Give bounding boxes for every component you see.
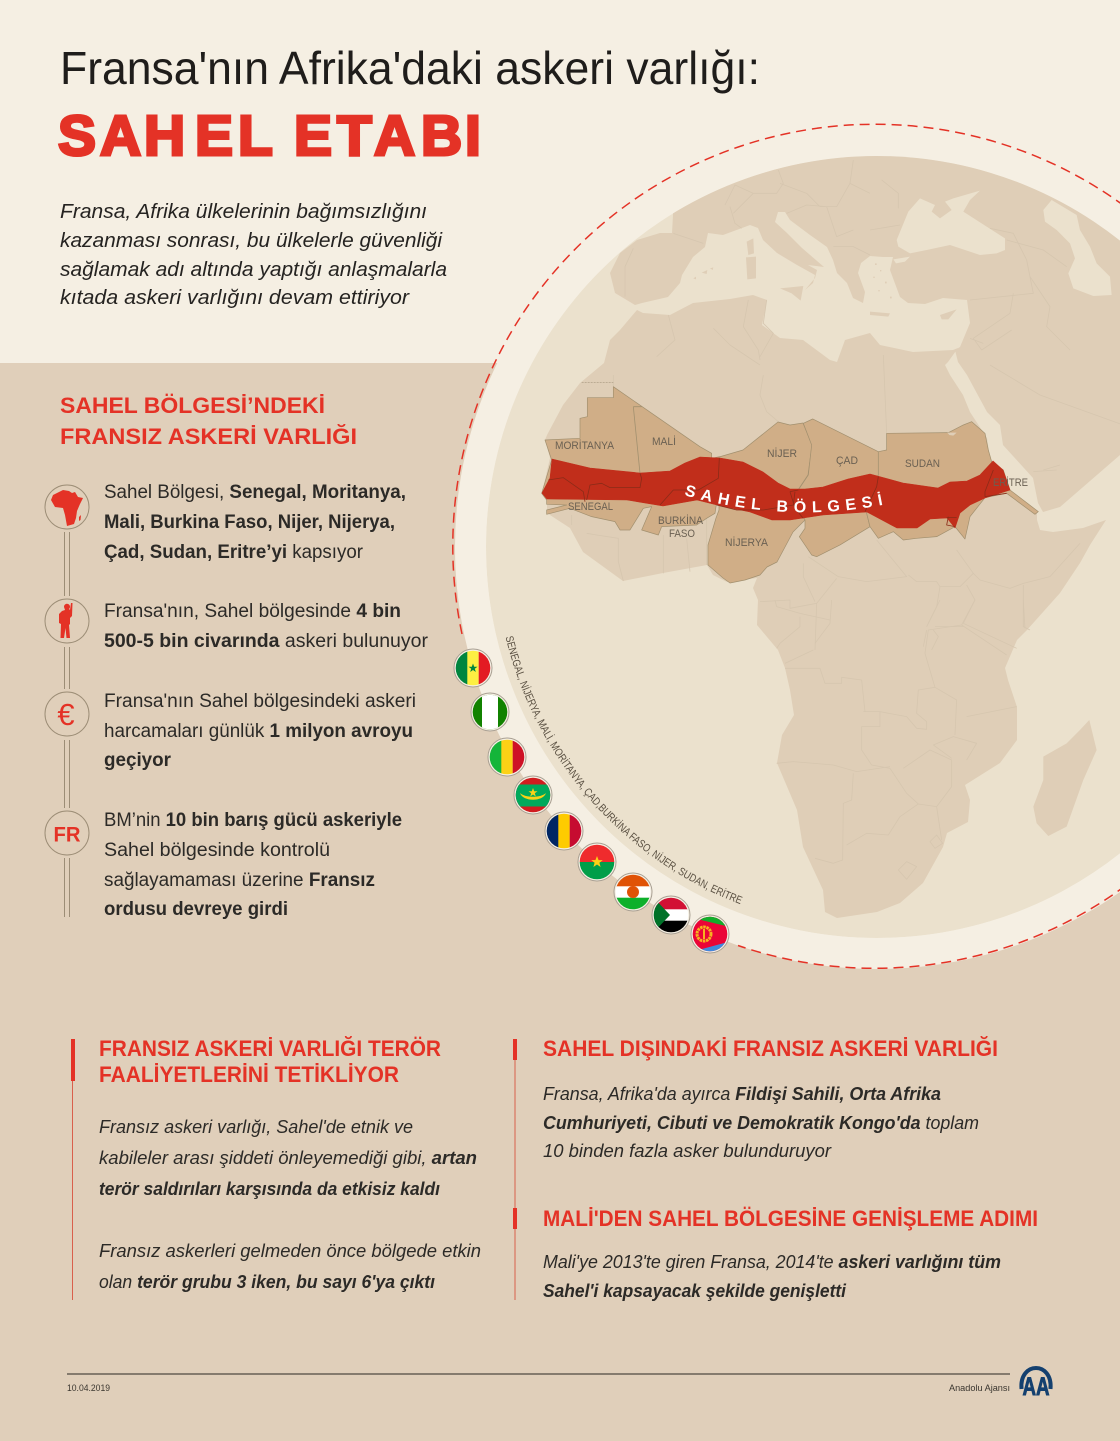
text: terror: Fransız askeri varlığı, Sahel'de etnik ve bbox=[99, 1117, 413, 1137]
text: spending bbox=[104, 691, 416, 771]
text: Sahel countries: Mali, Burkina Faso, Nijer, Nijerya, bbox=[104, 512, 395, 533]
heading: Mali expansion: MALİ'DEN SAHEL BÖLGESİNE GENİŞLEME ADIMI bbox=[543, 1206, 1038, 1231]
country labels: SUDAN bbox=[905, 458, 940, 470]
internal borders on band bbox=[548, 458, 795, 510]
flag: Mauritania bbox=[514, 776, 552, 814]
land and borders: Madagascar and southern Africa bbox=[775, 600, 1097, 879]
text: UN peacekeepers: sağlayamaması üzerine Fransız bbox=[104, 870, 375, 891]
panel: terror bbox=[71, 1036, 481, 1300]
islands: Crete, Cyprus, Aegean bbox=[870, 263, 957, 319]
heading: outside Sahel: SAHEL DIŞINDAKİ FRANSIZ ASKERİ VARLIĞI bbox=[543, 1036, 998, 1061]
text: UN peacekeepers: ordusu devreye girdi bbox=[104, 899, 288, 920]
borders: central Africa bbox=[760, 540, 1080, 650]
logo: Anadolu Agency: AA bbox=[1022, 1373, 1050, 1401]
intro text: kıtada askeri varlığını devam ettiriyor bbox=[60, 287, 410, 309]
country labels: MORİTANYA bbox=[555, 439, 615, 452]
Sahel countries bbox=[542, 387, 1038, 583]
red Sahel band bbox=[542, 457, 1010, 528]
text: UN peacekeepers bbox=[104, 810, 402, 920]
water: Caspian bbox=[1043, 200, 1112, 296]
country labels: BURKİNA bbox=[658, 514, 704, 527]
heading: terror: FRANSIZ ASKERİ VARLIĞI TERÖR bbox=[99, 1036, 441, 1061]
icon: soldier bbox=[45, 599, 89, 643]
borders around Sahara and the Red Sea bbox=[713, 328, 1120, 472]
intro text: sağlamak adı altında yaptığı anlaşmalarla bbox=[60, 259, 447, 281]
text: terror: kabileler arası şiddeti önleyemediği gibi, artan bbox=[99, 1148, 477, 1168]
text: terror bbox=[99, 1117, 481, 1292]
heading: terror bbox=[99, 1036, 441, 1087]
country labels: MALİ bbox=[652, 435, 676, 448]
text: spending: geçiyor bbox=[104, 750, 172, 771]
curved list of countries: SENEGAL, NİJERYA, MALİ, MORİTANYA, ÇAD,BURKİNA FASO, NİJER, SUDAN, ERİTRE bbox=[506, 636, 743, 904]
water and islands in the north-east bbox=[870, 180, 1112, 350]
flag: Burkina Faso bbox=[578, 843, 616, 881]
logo: Anadolu Agency bbox=[1021, 1368, 1051, 1401]
flag: Nigeria bbox=[471, 693, 509, 731]
icon: euro bbox=[45, 692, 89, 736]
text: terror: olan terör grubu 3 iken, bu sayı 6'ya çıktı bbox=[99, 1272, 435, 1292]
text: Sahel countries: Çad, Sudan, Eritre’yi kapsıyor bbox=[104, 542, 364, 563]
country labels: NİJERYA bbox=[725, 536, 769, 549]
Chad and Sudan bbox=[798, 419, 1038, 557]
globe ring bbox=[455, 125, 1120, 969]
text: Mali expansion bbox=[543, 1252, 1001, 1301]
intro text: Fransa, Afrika ülkelerinin bağımsızlığını bbox=[60, 201, 427, 223]
flag: Eritrea bbox=[691, 915, 729, 953]
source: Anadolu Ajansı bbox=[949, 1383, 1010, 1393]
water: Marmara bbox=[893, 257, 910, 263]
land: Africa bbox=[542, 295, 1106, 918]
dashed red orbit bbox=[453, 124, 1120, 968]
section heading: FRANSIZ ASKERİ VARLIĞI bbox=[60, 424, 357, 449]
text: outside Sahel: Cumhuriyeti, Cibuti ve Demokratik Kongo'da toplam bbox=[543, 1113, 979, 1133]
section heading: SAHEL BÖLGESİ’NDEKİ bbox=[60, 393, 325, 418]
icon: FR: FR bbox=[54, 824, 80, 846]
Niger and Nigeria bbox=[708, 422, 812, 583]
icon: FR bbox=[45, 811, 89, 855]
text: troop numbers: 500-5 bin civarında askeri bulunuyor bbox=[104, 631, 429, 652]
title: Fransa'nın Afrika'daki askeri varlığı: bbox=[60, 42, 760, 94]
country labels: SENEGAL bbox=[568, 501, 613, 513]
text: outside Sahel bbox=[543, 1084, 979, 1161]
flag: Niger bbox=[614, 873, 652, 911]
text: Mali expansion: Sahel'i kapsayacak şekilde genişletti bbox=[543, 1281, 847, 1301]
section heading bbox=[60, 393, 357, 449]
date: 10.04.2019 bbox=[67, 1383, 110, 1393]
flag: Sudan bbox=[652, 896, 690, 934]
text: UN peacekeepers: BM’nin 10 bin barış gücü askeriyle bbox=[104, 810, 402, 831]
text: outside Sahel: 10 binden fazla asker bulunduruyor bbox=[543, 1141, 832, 1161]
text: outside Sahel: Fransa, Afrika'da ayırca Fildişi Sahili, Orta Afrika bbox=[543, 1084, 941, 1104]
footer bbox=[67, 1368, 1051, 1401]
flag: Chad bbox=[545, 812, 583, 850]
intro text bbox=[60, 201, 447, 309]
flags bbox=[454, 649, 729, 953]
country labels: ERİTRE bbox=[993, 476, 1028, 489]
band label: SAHEL BÖLGESİ bbox=[685, 485, 882, 512]
text: troop numbers bbox=[104, 601, 429, 652]
red headline: SAHELETABI bbox=[58, 104, 481, 168]
text: Sahel countries bbox=[104, 482, 406, 563]
text: Mali expansion: Mali'ye 2013'te giren Fransa, 2014'te askeri varlığını tüm bbox=[543, 1252, 1001, 1272]
panel: Mali expansion bbox=[513, 1206, 1038, 1301]
islands and borders in Mediterranean bbox=[625, 160, 870, 360]
icon: Africa bbox=[45, 485, 89, 529]
text: troop numbers: Fransa'nın, Sahel bölgesinde 4 bin bbox=[104, 601, 401, 622]
text: Sahel countries: Sahel Bölgesi, Senegal, Moritanya, bbox=[104, 482, 406, 503]
country labels: ÇAD bbox=[836, 455, 858, 467]
country labels: FASO bbox=[669, 528, 695, 540]
text: terror: Fransız askerleri gelmeden önce bölgede etkin bbox=[99, 1241, 481, 1261]
globe map bbox=[486, 100, 1120, 938]
panel: outside Sahel bbox=[513, 1036, 998, 1300]
text: UN peacekeepers: Sahel bölgesinde kontrolü bbox=[104, 840, 330, 861]
heading: terror: FAALİYETLERİNİ TETİKLİYOR bbox=[99, 1062, 399, 1087]
Mauritania, Mali, Senegal, Burkina Faso bbox=[542, 387, 719, 535]
icon: euro: € bbox=[57, 697, 75, 732]
flag: Mali bbox=[488, 738, 526, 776]
timeline connector lines bbox=[64, 532, 70, 917]
text: terror: terör saldırıları karşısında da etkisiz kaldı bbox=[99, 1179, 440, 1199]
country labels bbox=[555, 435, 1028, 549]
flag: Senegal bbox=[454, 649, 492, 687]
text: spending: harcamaları günlük 1 milyon avroyu bbox=[104, 721, 413, 742]
country labels: NİJER bbox=[767, 447, 797, 460]
text: spending: Fransa'nın Sahel bölgesindeki askeri bbox=[104, 691, 416, 712]
intro text: kazanması sonrası, bu ülkelerle güvenliği bbox=[60, 230, 443, 252]
water: Black Sea bbox=[897, 191, 1005, 255]
land: Eurasia bbox=[610, 156, 1120, 512]
